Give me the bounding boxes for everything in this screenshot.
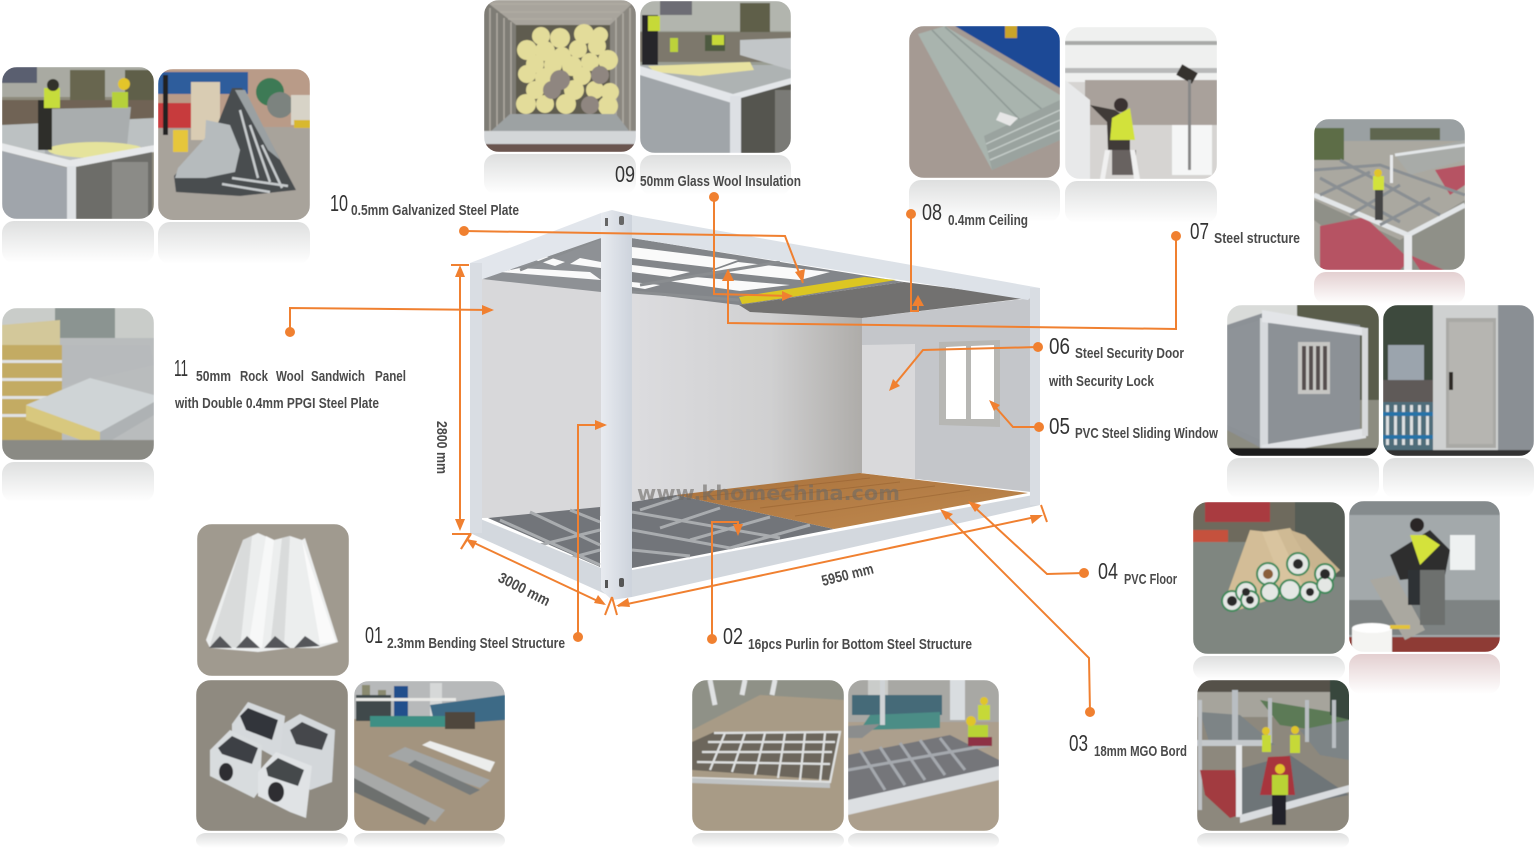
label 02: 16pcs Purlin for Bottom Steel Structure: [748, 636, 972, 653]
label 11: Rock: [240, 368, 268, 385]
leader 06: [891, 347, 1038, 389]
label 11: Wool: [276, 368, 304, 385]
label 08: 0.4mm Ceiling: [948, 212, 1028, 229]
label 11: Panel: [375, 368, 406, 385]
label 06: with Security Lock: [1048, 373, 1155, 390]
arrowheads and dots: [285, 192, 1181, 717]
photo: purlin frame assembly: [848, 680, 999, 831]
label 05: 05: [1049, 413, 1070, 439]
photo: workers laying floor: [1349, 501, 1500, 652]
photo: container exterior with window: [1227, 305, 1379, 456]
leader 01: [578, 425, 605, 637]
label 09: 09: [615, 161, 635, 187]
photo: ceiling panels: [909, 26, 1060, 178]
leader 10: [464, 231, 803, 283]
label 07: [1190, 218, 1300, 247]
label 11: [174, 355, 406, 412]
label 05: PVC Steel Sliding Window: [1075, 425, 1218, 442]
photo: workers laying glass wool: [640, 1, 791, 153]
photo: PVC floor rolls: [1193, 502, 1345, 654]
photo: rock wool sandwich panels: [2, 308, 154, 460]
dimension 2800: [451, 265, 470, 549]
photo: worker installing ceiling: [1065, 27, 1217, 179]
label 05: [1049, 413, 1218, 442]
dimension 5950: [605, 505, 1047, 615]
photo: glass wool rolls in container: [484, 0, 636, 152]
corner posts: [470, 210, 1040, 600]
label 07: 07: [1190, 218, 1209, 244]
floor purlins: [488, 495, 834, 568]
bottom beams: [470, 495, 1040, 597]
label 06: 06: [1049, 333, 1070, 359]
leader 08: [911, 214, 918, 311]
label 10: 10: [330, 190, 348, 216]
label 08: [922, 199, 1028, 229]
leader 11: [290, 308, 492, 332]
photo: stack of bent steel plates: [158, 69, 310, 221]
leader 04: [970, 503, 1084, 574]
top beams: [470, 213, 1040, 300]
container house illustration: [470, 210, 1040, 600]
label 01: [365, 622, 565, 652]
orange callout leaders: [290, 197, 1176, 712]
yellow insulation strip: [739, 277, 896, 304]
end wall: [482, 279, 601, 518]
dimension label 2800 mm: 2800 mm: [433, 421, 450, 474]
photo: worker fitting roof panel: [2, 67, 154, 219]
label 06: [1048, 333, 1184, 390]
photo: security door: [1383, 305, 1534, 456]
watermark: www.khomechina.com: [637, 481, 900, 505]
dimension 3000: [461, 534, 604, 604]
label 08: 08: [922, 199, 942, 225]
right wall: [862, 298, 1031, 492]
dimension label 3000 mm: 3000 mm: [495, 569, 553, 610]
label 04: 04: [1098, 558, 1118, 584]
label 03: 18mm MGO Bord: [1094, 743, 1187, 760]
label 04: [1098, 558, 1177, 588]
photo: steel structure frame: [1314, 119, 1465, 270]
label 04: PVC Floor: [1124, 571, 1177, 588]
wood floor: [676, 473, 1028, 529]
dark ceiling panel: [739, 282, 1028, 318]
photo: steel corner fittings: [196, 680, 348, 831]
label 11: 50mm: [196, 368, 231, 385]
photo: MGO board installation: [1197, 680, 1350, 831]
leader 09: [714, 197, 790, 296]
label 10: 0.5mm Galvanized Steel Plate: [351, 202, 519, 219]
window: [939, 340, 1000, 427]
label 01: 01: [365, 622, 383, 648]
label 11: 11: [174, 355, 188, 381]
label 09: [615, 161, 801, 190]
roof purlins: [482, 238, 904, 305]
photo: frame parts in yard: [354, 681, 505, 831]
label 01: 2.3mm Bending Steel Structure: [387, 635, 565, 652]
dimension label 5950 mm: 5950 mm: [820, 561, 875, 590]
label 11: with Double 0.4mm PPGI Steel Plate: [174, 395, 379, 412]
leader 02: [712, 522, 738, 639]
label 09: 50mm Glass Wool Insulation: [640, 173, 801, 190]
photo: bending steel angles: [197, 524, 349, 676]
label 11: Sandwich: [311, 368, 365, 385]
door: [862, 344, 915, 479]
label 02: 02: [723, 623, 743, 649]
label 02: [723, 623, 972, 653]
leader 03: [942, 511, 1090, 712]
label 10: [330, 190, 519, 219]
long back wall: [632, 285, 862, 502]
label 03: [1069, 730, 1187, 760]
label 06: Steel Security Door: [1075, 345, 1184, 362]
photo: purlin frame on ground: [692, 680, 844, 831]
label 03: 03: [1069, 730, 1088, 756]
leader 05: [991, 402, 1039, 427]
leader 07: [728, 236, 1176, 329]
label 07: Steel structure: [1214, 230, 1300, 247]
